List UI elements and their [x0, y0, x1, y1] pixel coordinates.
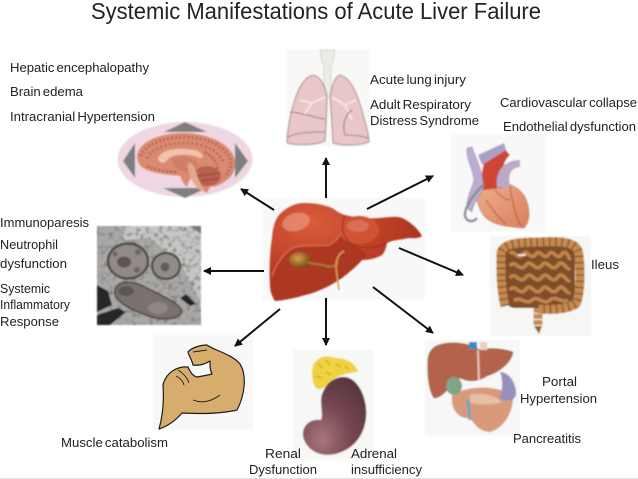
text: immune effects [0, 215, 89, 329]
text: cardiovascular effects [500, 95, 637, 134]
arrow: to kidney [325, 298, 327, 345]
ventricles [477, 182, 529, 228]
panel: intestine illustration [490, 236, 591, 336]
arrow: to micrograph [204, 270, 264, 272]
kidney [303, 377, 366, 455]
text: brain effects [10, 60, 155, 124]
text: portal hypertension [520, 374, 597, 406]
text: adrenal insufficiency: Adrenal [351, 446, 397, 461]
text: ileus: Ileus [591, 257, 620, 272]
text: adrenal insufficiency: insufficiency [351, 462, 422, 477]
text: lung effects [370, 72, 479, 128]
pulmonary artery [497, 160, 520, 188]
vena cava [467, 147, 483, 212]
text: brain effects: Intracranial Hypertension [10, 109, 155, 124]
debris texture [97, 226, 201, 325]
text: brain effects: Brain edema [10, 84, 84, 99]
text: portal hypertension: Hypertension [520, 391, 597, 406]
brain [137, 133, 235, 193]
right lung [330, 75, 369, 145]
stomach and pancreas [452, 388, 513, 432]
text: lung effects: Adult Respiratory [370, 97, 472, 112]
vessels [469, 342, 477, 349]
arrow: to heart [367, 176, 433, 209]
text: brain effects: Hepatic encephalopathy [10, 60, 149, 75]
trachea [320, 50, 335, 96]
panel: central liver illustration [262, 198, 425, 301]
text: adrenal insufficiency [351, 446, 422, 477]
text: renal dysfunction: Dysfunction [249, 462, 317, 477]
gallbladder [446, 377, 462, 395]
text: renal dysfunction [249, 446, 317, 477]
gallbladder [289, 252, 311, 268]
bicep [159, 345, 244, 429]
text: immune effects: Response [0, 314, 59, 329]
liver [270, 203, 422, 301]
cell 1 [108, 244, 148, 278]
highlight [280, 210, 312, 234]
text: immune effects: Systemic [0, 281, 50, 296]
text: immune effects: dysfunction [0, 256, 67, 271]
lower lobe shadow [271, 232, 367, 301]
text: cardiovascular effects: Endothelial dysfunction [503, 119, 636, 134]
small bowel mass [505, 246, 575, 308]
panel: lungs illustration [287, 49, 369, 147]
arrow: to brain [241, 189, 274, 210]
text: portal hypertension: Portal [542, 374, 577, 389]
bile duct [336, 251, 344, 290]
rectum [534, 308, 542, 326]
panel: flexed muscle icon [153, 335, 253, 430]
liver [428, 343, 513, 398]
panel: portal system illustration [425, 340, 520, 436]
right lobe bulge [339, 216, 379, 244]
text: immune effects: Immunoparesis [0, 215, 89, 230]
panel: electron micrograph [97, 226, 201, 325]
panel: brain illustration [118, 122, 252, 198]
gray directional triangles [123, 122, 248, 198]
cell 3 [115, 282, 182, 319]
text: immune effects: Neutrophil [0, 237, 58, 252]
aorta [482, 147, 510, 190]
arrow: to intestine [399, 248, 463, 275]
text: cardiovascular effects: Cardiovascular collapse [500, 95, 637, 110]
adrenal gland [312, 356, 358, 389]
text: lung effects: Distress Syndrome [370, 113, 479, 128]
left lung [287, 75, 327, 145]
spleen [499, 372, 516, 401]
arrow: to muscle [235, 309, 280, 346]
arrow: to portal system [373, 287, 433, 333]
text: pancreatitis: Pancreatitis [513, 431, 581, 446]
colon frame [501, 242, 580, 309]
text: lung effects: Acute lung injury [370, 72, 466, 87]
cell 2 [152, 253, 180, 279]
arrow: to lungs [325, 158, 327, 198]
text: renal dysfunction: Renal [265, 446, 301, 461]
text: muscle catabolism: Muscle catabolism [61, 435, 168, 450]
panel: kidney and adrenal illustration [293, 350, 373, 460]
panel: heart illustration [451, 134, 545, 232]
text: immune effects: Inflammatory [0, 297, 70, 312]
gray vessel loop [465, 184, 484, 221]
